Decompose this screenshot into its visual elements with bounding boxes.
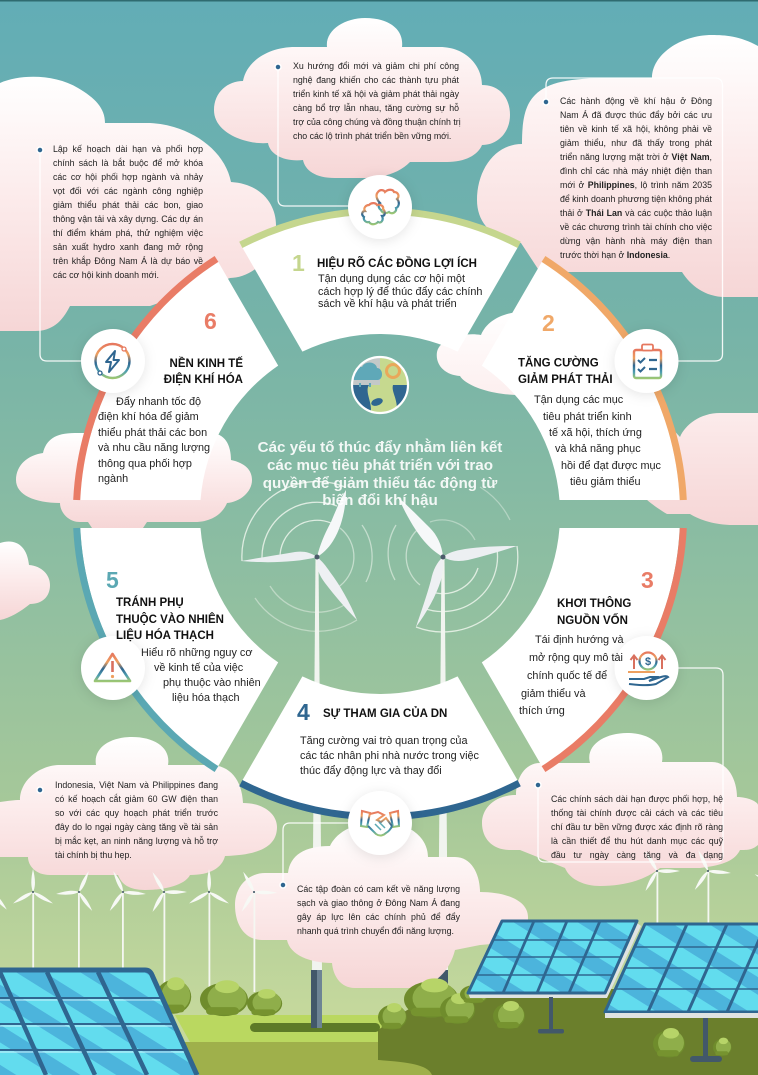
text block: innovation trend: cho các lộ trình phát triển bền vững mới. (293, 131, 451, 141)
segment 1 text: HIỆU RÕ CÁC ĐỒNG LỢI ÍCH (317, 257, 477, 270)
segment 1 text: cách hợp lý để thúc đẩy các chính (318, 286, 482, 298)
central title: quyền để giảm thiểu tác động từ (263, 475, 497, 492)
segment 3 text: thích ứng (519, 705, 565, 717)
text block: long-term planning: trên khắp Đông Nam Á là dự báo về (53, 256, 203, 266)
cloud: top left (0, 77, 276, 331)
text block: innovation trend (293, 61, 461, 141)
segment 2 text: 2 (542, 310, 555, 336)
segment 6 text: ĐIỆN KHÍ HÓA (164, 373, 243, 386)
segment 5 text: liệu hóa thạch (172, 692, 240, 704)
segment 3 text: mở rộng quy mô tài (529, 652, 623, 664)
cloud: lower right (482, 733, 758, 886)
bushes (156, 977, 732, 1057)
icon 6: electrification (81, 329, 145, 393)
text block: corporations: Các tập đoàn có cam kết về năng lượng (297, 884, 460, 894)
text block: long-term planning: thí điểm khám phá, thử nghiệm việc (53, 228, 203, 238)
cloud: behind segment 6 (16, 433, 252, 528)
cloud: top centre (214, 18, 510, 178)
large wind turbines towers (250, 557, 448, 1032)
text block: long-term policies: chí đầu tư bền vững được xác định rõ ràng (551, 822, 723, 832)
text block: coal reduction: so với các quy hoạch phát triển trước (55, 808, 218, 818)
segment 1 text: sách về khí hậu và phát triển (318, 298, 457, 310)
text block: coal reduction: có kế hoạch cắt giảm 60 GW điện than (55, 794, 218, 804)
central wind turbines with arcs (241, 482, 518, 632)
text block: coal reduction: tài chính bị thu hẹp. (55, 850, 132, 860)
text block: climate action (560, 96, 712, 260)
segment 6 text: ngành (98, 473, 128, 485)
segment 3 shape (482, 528, 683, 769)
solar panel: bottom left (0, 968, 199, 1075)
segment 2 text: tiêu phát triển kinh (543, 411, 632, 423)
cloud: behind segment 2 (437, 312, 758, 525)
segment 2 text: GIẢM PHÁT THẢI (518, 373, 613, 386)
text block: innovation trend: trợ của công chúng và đồng thuận chính trị (293, 117, 461, 127)
icon: globe (350, 355, 410, 417)
text block: long-term policies (551, 794, 723, 860)
segment 5 shape (77, 528, 278, 769)
text block: innovation trend: nghệ đang khiến cho các thành tựu phát (293, 75, 459, 85)
segment 4 text: Tăng cường vai trò quan trọng của (300, 735, 468, 747)
text block: long-term planning: các cơ hội phối hợp ngành và nhảy (53, 172, 203, 182)
solar panel: middle (468, 921, 641, 1034)
icon 1: puzzle pieces (348, 175, 412, 239)
segment 4 text: thúc đẩy động lực và thay đổi (300, 765, 442, 777)
central title: biến đổi khí hậu (322, 492, 438, 509)
text block: long-term policies: Các chính sách dài hạn được phối hợp, hệ (551, 794, 723, 804)
segment 2 text: hồi để đạt được mục (561, 460, 662, 472)
text block: coal reduction: Indonesia, Việt Nam và Philippines đang (55, 780, 218, 790)
text block: long-term policies: là cần thiết để thu hút danh mục các quỹ (551, 836, 723, 846)
segment 2 text: Tận dụng các mục (534, 394, 624, 406)
segment 5 text: LIỆU HÓA THẠCH (116, 629, 214, 642)
text block: corporations: nhanh quá trình chuyển đổi năng lượng. (297, 926, 454, 936)
cloud: lower centre (235, 822, 528, 988)
text block: long-term planning: Lập kế hoạch dài hạn và phối hợp (53, 144, 203, 154)
bullet dots (37, 64, 549, 888)
text block: long-term planning (53, 144, 203, 280)
segment 4 text (297, 699, 480, 777)
cloud: lower left (0, 737, 277, 890)
small wind turbines (0, 841, 758, 992)
segment 6 text: NỀN KINH TẾ (170, 357, 243, 370)
segment 6 text: Đẩy nhanh tốc độ (116, 396, 201, 408)
central title (258, 438, 502, 509)
text block: climate action: tiên về kinh tế xã hội, không phải về (560, 124, 712, 134)
text block: long-term policies: đầu tư ngày càng tăng và đa dạng (551, 850, 723, 860)
text block: coal reduction: đây do lo ngại ngày càng tăng về tài sản (55, 822, 218, 832)
text block: innovation trend: Xu hướng đổi mới và giảm chi phí công (293, 61, 459, 71)
segment 1 text: Tận dụng dụng các cơ hội một (318, 273, 465, 285)
segment 3 text: giảm thiểu và (521, 688, 586, 700)
icon 5: warning triangle (81, 636, 145, 700)
text block: climate action: mới ở Philippines, lộ trình năm 2035 (560, 180, 712, 190)
segment 5 text (106, 567, 261, 704)
icon 4: handshake (348, 791, 412, 855)
segment 3 text: Tái định hướng và (535, 634, 624, 646)
segment 6 text: điện khí hóa để giảm (98, 411, 199, 423)
segment 4 text: các tác nhân phi nhà nước trong việc (300, 750, 480, 762)
segment 2 shape (482, 259, 683, 500)
segment 6 shape (77, 259, 278, 500)
segment 6 text (98, 308, 243, 485)
icon 2: clipboard checklist (614, 329, 678, 393)
segment 5 text: phụ thuộc vào nhiên (163, 677, 261, 689)
text block: coal reduction (55, 780, 218, 860)
text block: corporations: sạch và giao thông ở Đông Nam Á đang (297, 898, 460, 908)
segment 2 text: và khả năng phục (555, 443, 641, 455)
text block: coal reduction: bị mắc kẹt, an ninh năng lượng và hỗ trợ (55, 836, 218, 846)
segment 3 text: KHƠI THÔNG (557, 597, 631, 610)
text block: corporations (297, 884, 460, 936)
cloud: left edge (0, 541, 50, 620)
segment 4 shape (241, 676, 519, 817)
text block: innovation trend: triển kinh tế xã hội và giảm phát thải ngày (293, 89, 459, 99)
text block: climate action: Các hành động về khí hậu ở Đông (560, 96, 712, 106)
segment 6 text: 6 (204, 308, 217, 334)
segment 5 text: Hiểu rõ những nguy cơ (141, 647, 252, 659)
icon 3: finance hand (614, 636, 678, 700)
segment 2 text: tiêu giảm thiểu (570, 476, 641, 488)
segment 6 text: và nhu cầu năng lượng (98, 442, 210, 454)
segment 1 text: 1 (292, 250, 305, 276)
central title: các mục tiêu phát triển với trao (267, 457, 493, 474)
cloud: top right (477, 35, 758, 297)
ground (175, 985, 758, 1075)
segment 5 text: THUỘC VÀO NHIÊN (116, 613, 224, 626)
segment 3 text: 3 (641, 567, 654, 593)
segment 2 text: TĂNG CƯỜNG (518, 356, 599, 370)
text block: long-term planning: các cơ hội kinh doanh mới. (53, 270, 159, 280)
segment 5 text: TRÁNH PHỤ (116, 596, 184, 609)
segment 5 text: về kinh tế của việc (154, 662, 244, 674)
text block: climate action: triển năng lượng mặt trời ở Việt Nam, (560, 152, 712, 162)
segment 3 text: NGUỒN VỐN (557, 613, 628, 627)
solar panel: right (605, 924, 758, 1062)
icon 3: finance hand: $ (645, 656, 651, 668)
segment 3 text: chính quốc tế để (527, 670, 607, 682)
text block: climate action: thải ở Thái Lan và các cuộc thảo luận (560, 208, 712, 218)
text block: climate action: giảm thiểu, như đã thấy trong phát (560, 138, 712, 148)
segment 2 text: tế xã hội, thích ứng (549, 427, 642, 439)
text block: long-term planning: giảm thiểu phát thải các bon, giao (53, 200, 203, 210)
text block: climate action: Nam Á đã được thúc đẩy bởi các ưu (560, 110, 712, 120)
segment 5 text: 5 (106, 567, 119, 593)
text block: innovation trend: càng bổ trợ lẫn nhau, tăng cường sự hỗ (293, 103, 459, 113)
segment 1 text (292, 250, 482, 310)
segment 6 text: thông qua phối hợp (98, 458, 192, 470)
segment 6 text: thiểu phát thải các bon (98, 427, 207, 439)
text block: long-term planning: chính sách là bắt buộc để mở khóa (53, 158, 203, 168)
text block: climate action: đình chỉ các nhà máy nhiệt điện than (560, 166, 712, 176)
text block: long-term planning: sản xuất hydro xanh đang mở rộng (53, 242, 203, 252)
central title: Các yếu tố thúc đẩy nhằm liên kết (258, 438, 502, 456)
text block: climate action: trước thời hạn ở Indonesia. (560, 250, 670, 260)
segment 1 shape (241, 211, 519, 352)
segment 4 text: 4 (297, 699, 310, 725)
segment 4 text: SỰ THAM GIA CỦA DN (323, 707, 447, 720)
text block: climate action: về các chương trình tài chính cho việc (560, 222, 712, 232)
text block: long-term policies: thống tài chính được cải cách và các tiêu (551, 808, 723, 818)
segment 3 text (519, 567, 654, 717)
segment 2 text (518, 310, 662, 488)
text block: long-term planning: vọt đối với các ngành công nghiệp (53, 186, 203, 196)
text block: long-term planning: thông vận tải và xây dựng. Các dự án (53, 214, 203, 224)
connector lines (40, 67, 723, 885)
text block: climate action: dừng vận hành nhà máy điện than (560, 236, 712, 246)
text block: climate action: để kinh doanh phương tiện không phát (560, 194, 712, 204)
text block: corporations: gây áp lực lên các chính phủ để đẩy (297, 912, 460, 922)
